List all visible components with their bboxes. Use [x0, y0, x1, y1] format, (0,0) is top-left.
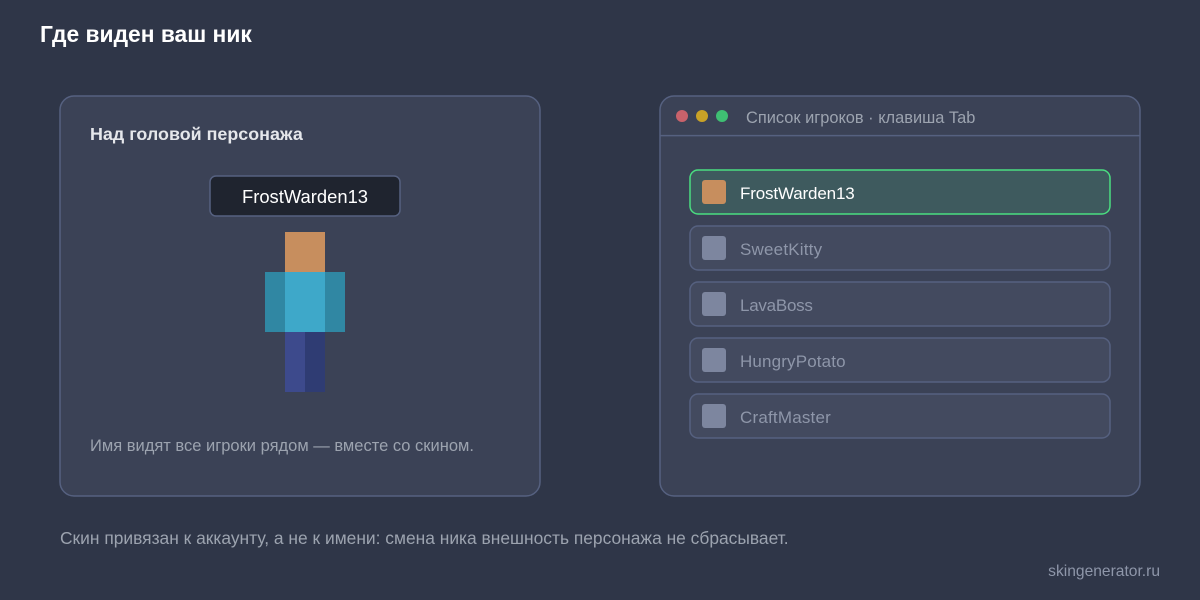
player row: LavaBoss — [690, 282, 1110, 326]
avatar: FrostWarden13 — [702, 180, 726, 204]
avatar: CraftMaster — [702, 404, 726, 428]
player row: FrostWarden13 highlighted — [690, 170, 1110, 214]
source credit: skingenerator.ru — [1048, 563, 1160, 580]
nametag text: FrostWarden13 — [242, 186, 368, 207]
panel: above head — [60, 96, 540, 496]
player row: CraftMaster — [690, 394, 1110, 438]
avatar: HungryPotato — [702, 348, 726, 372]
panel: player list — [660, 96, 1140, 496]
player name: HungryPotato: HungryPotato — [740, 352, 846, 371]
player row: SweetKitty — [690, 226, 1110, 270]
player name: LavaBoss: LavaBoss — [740, 296, 813, 315]
player name: SweetKitty: SweetKitty — [740, 240, 822, 259]
panel heading: above head: Над головой персонажа — [90, 124, 303, 144]
icon: character figure — [265, 232, 345, 392]
title: Где виден ваш ник — [40, 21, 252, 47]
player row: HungryPotato — [690, 338, 1110, 382]
player name: CraftMaster: CraftMaster — [740, 408, 831, 427]
nametag box — [210, 176, 400, 216]
avatar: SweetKitty — [702, 236, 726, 260]
footnote: Скин привязан к аккаунту, а не к имени: смена ника внешность персонажа не сбрасывает. — [60, 528, 789, 548]
window title: Список игроков · клавиша Tab — [746, 109, 975, 127]
player name: FrostWarden13: FrostWarden13 — [740, 184, 855, 203]
panel caption: Имя видят все игроки рядом — вместе со скином. — [90, 437, 474, 455]
avatar: LavaBoss — [702, 292, 726, 316]
window dots — [676, 110, 728, 122]
